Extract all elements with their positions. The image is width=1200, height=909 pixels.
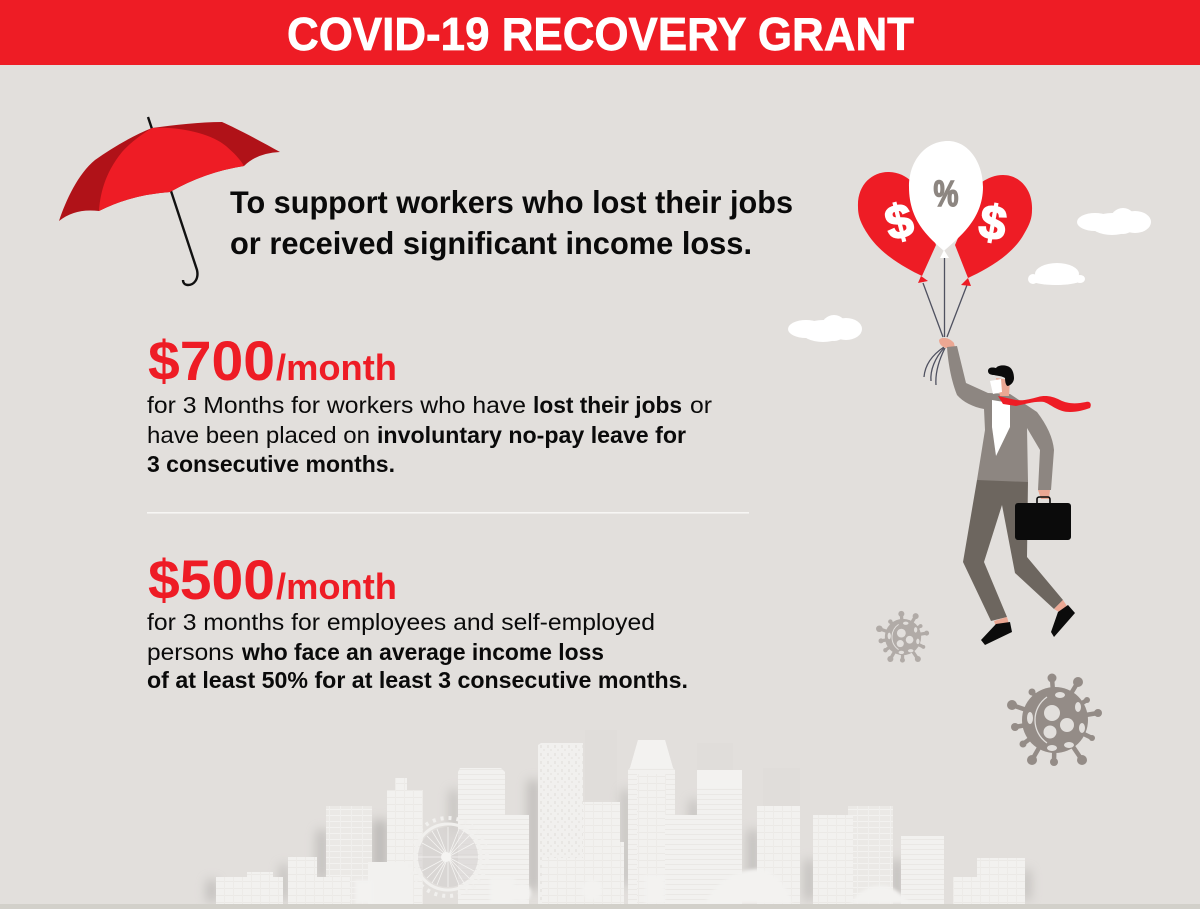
jacket	[947, 346, 1054, 490]
intro text	[230, 184, 793, 261]
soft shadows	[207, 780, 1030, 902]
hand holding case	[1038, 490, 1050, 499]
hand	[939, 338, 955, 348]
description: $500 eligibility: for 3 months for employees and self-employed	[147, 609, 655, 635]
description: $700 eligibility: have been placed on	[147, 422, 370, 448]
trees and foreground foliage	[355, 869, 912, 904]
low rise buildings	[288, 857, 317, 904]
balloon: left dollar	[858, 172, 936, 283]
icon: red umbrella	[59, 117, 280, 285]
shoes	[981, 605, 1075, 645]
ground strip	[0, 904, 1200, 909]
amount: $700/month: $700	[148, 329, 275, 392]
title banner	[0, 0, 1200, 65]
balloon: white percent: %	[934, 174, 958, 214]
head	[988, 365, 1014, 396]
description: $500 eligibility: of at least 50% for at least 3 consecutive months.	[147, 667, 688, 693]
ankles	[994, 600, 1067, 627]
description: $700 eligibility: or	[690, 392, 712, 418]
description: $500 eligibility: persons	[147, 639, 234, 665]
amount: $500/month: $500	[148, 548, 275, 611]
balloon: left dollar: $	[880, 193, 919, 251]
intro text: or received significant income loss.	[230, 225, 752, 261]
balloon: white percent	[909, 141, 983, 258]
balloon: right dollar	[955, 175, 1032, 286]
icon: balloons	[858, 141, 1032, 337]
description: $500 eligibility: who face an average income loss	[241, 639, 604, 665]
briefcase	[1015, 497, 1071, 540]
description: $700 eligibility: lost their jobs	[533, 392, 682, 418]
pants	[963, 480, 1063, 621]
balloon strings	[923, 258, 967, 337]
description: $700 eligibility: involuntary no-pay leave for	[377, 422, 686, 448]
ferris wheel	[409, 818, 487, 896]
red tie	[998, 396, 1091, 412]
intro text: To support workers who lost their jobs	[230, 184, 793, 220]
illustration: city skyline	[0, 730, 1200, 909]
amount: $500/month: /month	[276, 566, 397, 607]
description: $700 eligibility	[147, 392, 712, 477]
description: $500 eligibility	[147, 609, 688, 693]
faint background towers	[585, 730, 800, 808]
amount: $700/month	[148, 329, 397, 392]
description: $700 eligibility: 3 consecutive months.	[147, 451, 395, 477]
loose string ends	[924, 347, 945, 385]
amount: $700/month: /month	[276, 347, 397, 388]
description: $700 eligibility: for 3 Months for workers who have	[147, 392, 526, 418]
icon: large virus	[1007, 674, 1102, 766]
title banner: COVID-19 RECOVERY GRANT	[287, 8, 914, 60]
illustration: businessman floating	[924, 338, 1091, 645]
icon: small virus	[876, 611, 929, 663]
tall towers	[848, 806, 893, 904]
balloon: right dollar: $	[975, 195, 1011, 252]
panel: $500 per month	[147, 548, 688, 693]
shirt	[992, 400, 1010, 456]
amount: $500/month	[148, 548, 397, 611]
panel: $700 per month	[147, 329, 712, 477]
clouds	[788, 208, 1151, 342]
